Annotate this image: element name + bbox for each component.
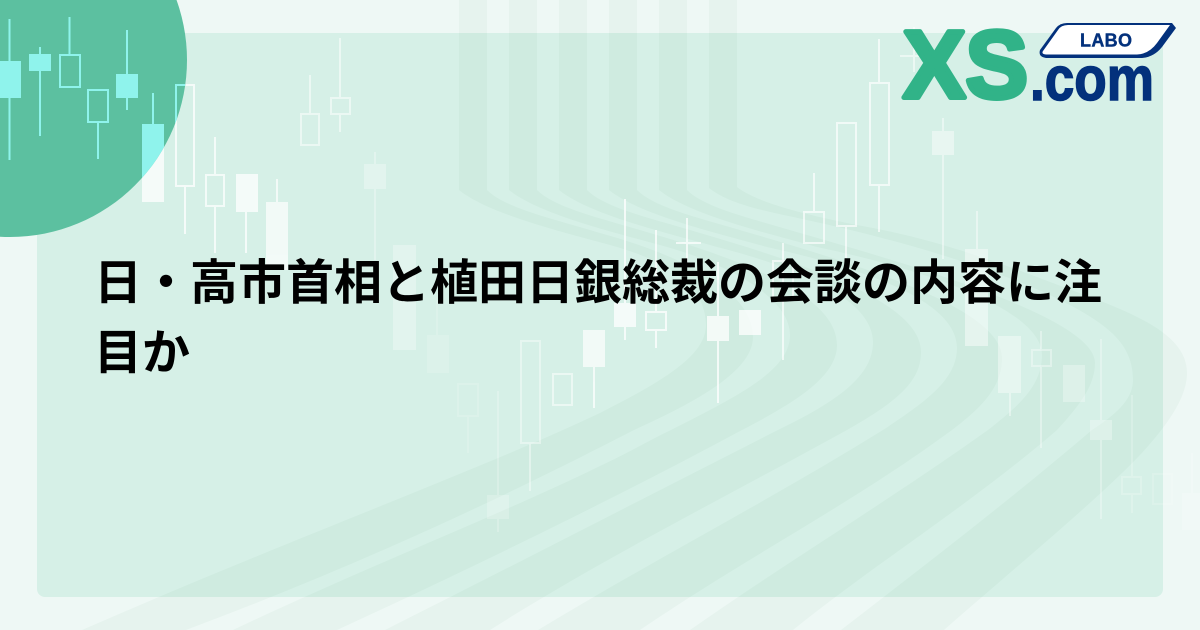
candlestick chart: cyan candles in circle	[0, 17, 186, 178]
logo badge outline	[1040, 23, 1176, 58]
candlestick chart: white background candles	[142, 27, 1200, 532]
title	[94, 257, 1102, 380]
logo: XS.com LABO	[903, 12, 1176, 118]
logo wordmark .com: .com	[1030, 45, 1154, 114]
corner circle	[0, 0, 187, 237]
title: 目か	[94, 327, 190, 380]
title: 日・高市首相と植田日銀総裁の会談の内容に注	[94, 257, 1102, 310]
logo badge label: LABO	[1080, 30, 1132, 50]
logo badge fill	[1042, 25, 1170, 54]
logo wordmark XS: XS	[903, 12, 1028, 118]
